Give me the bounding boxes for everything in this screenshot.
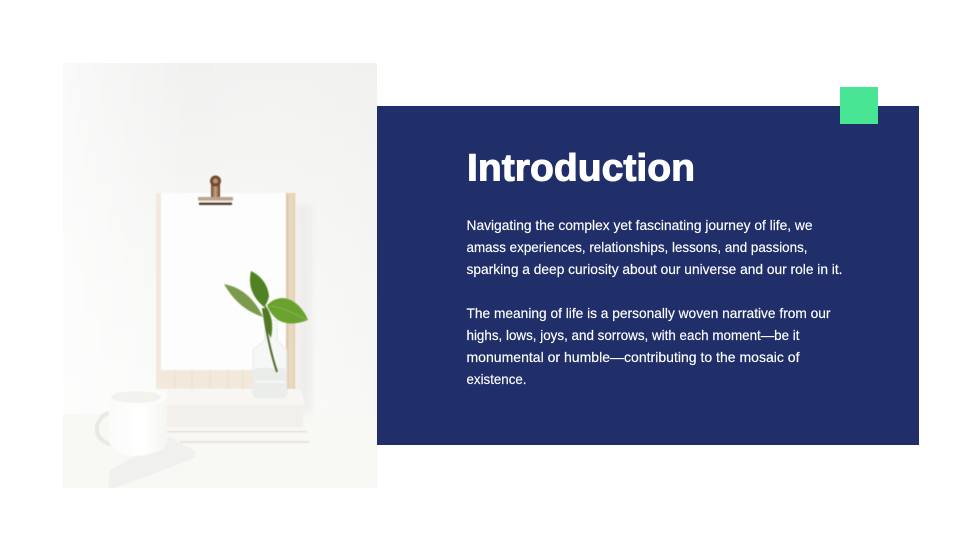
- text block: second paragraph: existence.: [466, 371, 526, 387]
- clipboard board: [156, 193, 296, 389]
- heading: Introduction: [467, 148, 695, 190]
- white mug: [95, 392, 160, 456]
- text block: first paragraph: [466, 217, 842, 277]
- text block: second paragraph: highs, lows, joys, and sorrows, with each moment—be it: [466, 327, 800, 343]
- marble coaster: [168, 438, 176, 442]
- panel: introduction: [377, 106, 919, 445]
- text block: second paragraph: [466, 305, 831, 387]
- photo: clipboard, plant, books and mug: [63, 63, 377, 488]
- binder clip: [198, 176, 233, 205]
- text block: first paragraph: Navigating the complex yet fascinating journey of life, we: [466, 217, 813, 233]
- glass vase: [253, 320, 287, 398]
- stacked books: [167, 397, 309, 443]
- text block: first paragraph: sparking a deep curiosity about our universe and our role in it.: [466, 261, 842, 277]
- green accent square: [840, 87, 878, 124]
- plant leaves: [224, 271, 308, 372]
- text block: second paragraph: The meaning of life is a personally woven narrative from our: [466, 305, 831, 321]
- text block: first paragraph: amass experiences, relationships, lessons, and passions,: [466, 239, 808, 255]
- text block: second paragraph: monumental or humble—contributing to the mosaic of: [466, 349, 800, 365]
